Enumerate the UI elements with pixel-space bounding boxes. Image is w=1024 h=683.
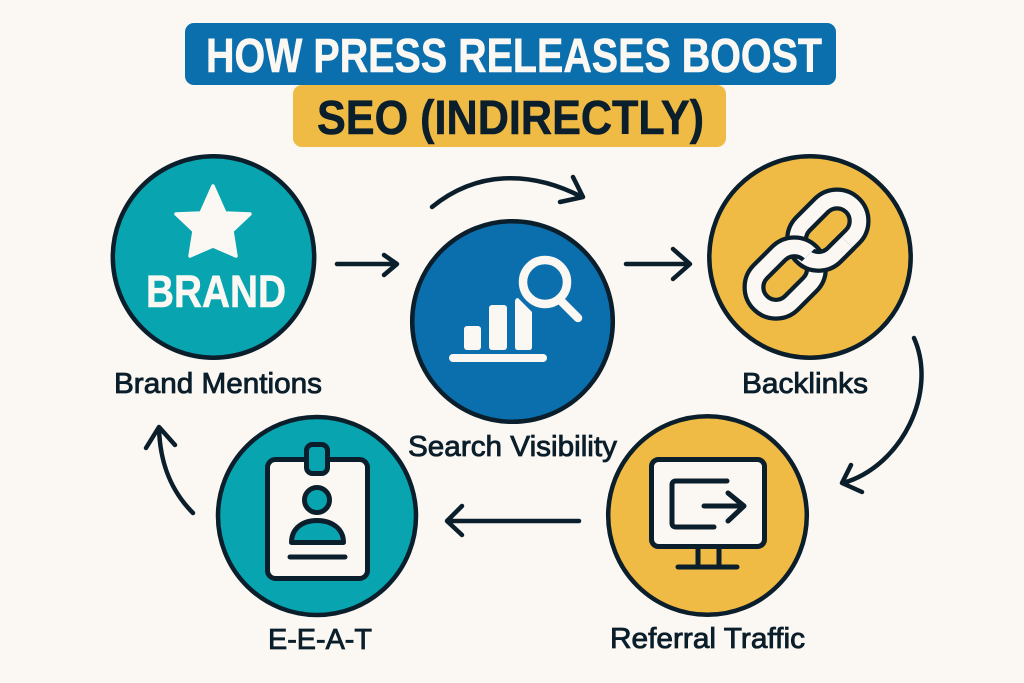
arrow: E-E-A-T to brand mentions: [146, 427, 193, 513]
label: Backlinks: Backlinks: [742, 368, 868, 400]
title line 2: yellow banner: SEO (INDIRECTLY): [317, 92, 704, 145]
arrow: curved over search: [432, 177, 583, 207]
panel: brand mentions: [113, 156, 322, 400]
label: Search Visibility: Search Visibility: [408, 431, 618, 463]
arrow: backlinks to referral traffic: [842, 338, 922, 492]
brand text in circle: BRAND: [146, 266, 286, 317]
label: Brand Mentions: Brand Mentions: [114, 368, 322, 400]
arrow: search to backlinks: [626, 249, 690, 279]
arrow: brand to search: [337, 255, 397, 275]
panel: referral traffic: [608, 416, 807, 655]
icon: star: [176, 186, 250, 256]
icon: bar chart with magnifier: [449, 260, 578, 362]
label: Referral Traffic: Referral Traffic: [610, 623, 805, 655]
panel: search visibility: [408, 221, 618, 463]
title line 1: blue banner: HOW PRESS RELEASES BOOST: [206, 30, 822, 83]
label: E-E-A-T: E-E-A-T: [268, 624, 372, 656]
panel: backlinks: [709, 156, 911, 400]
arrow: referral traffic to E-E-A-T: [447, 506, 579, 535]
icon: chain links: [742, 190, 871, 318]
icon: monitor with exit arrow: [652, 460, 764, 567]
icon: ID badge: [268, 444, 368, 578]
panel: E-E-A-T: [218, 417, 416, 656]
title: [185, 23, 836, 147]
